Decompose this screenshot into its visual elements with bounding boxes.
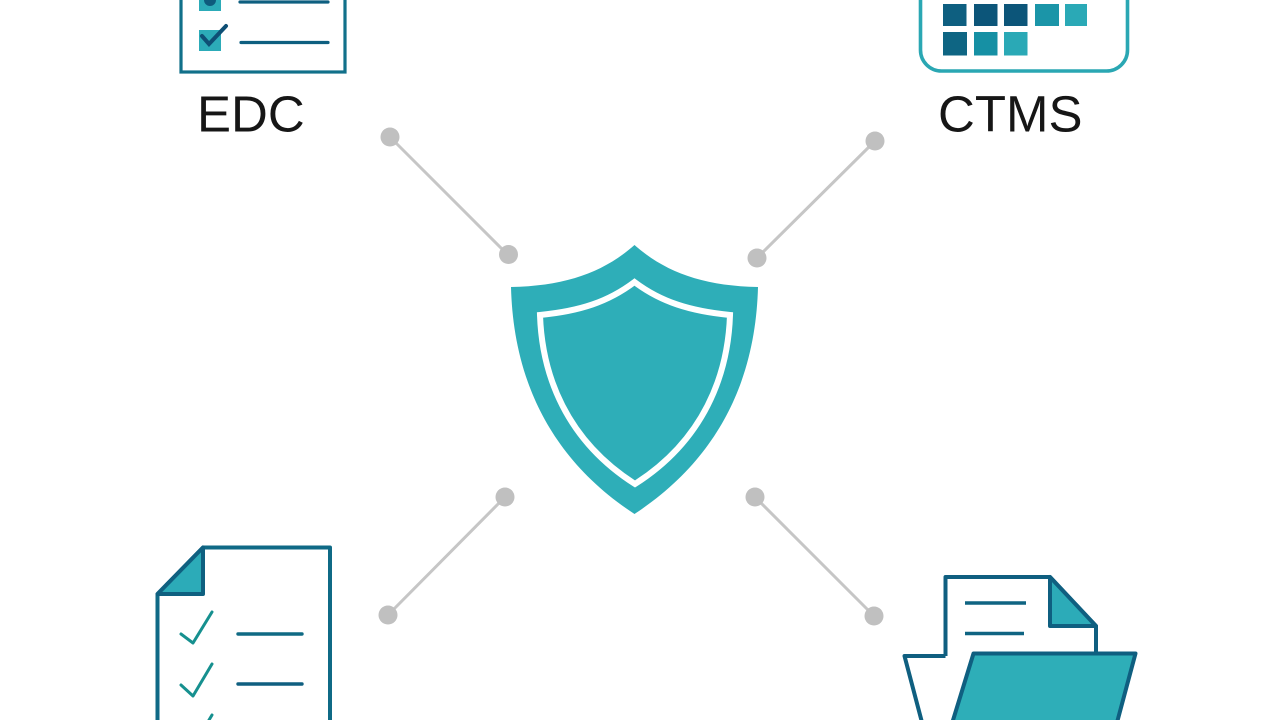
- icon: CTMS calendar grid: [920, 0, 1128, 71]
- connector: top-left: [380, 128, 518, 264]
- label: EDC: EDC: [197, 86, 305, 142]
- connector: bottom-left: [378, 488, 514, 624]
- icon: central shield: [511, 245, 758, 514]
- connector: top-right: [748, 132, 884, 268]
- connector: bottom-right: [746, 488, 884, 626]
- icon: checklist document: [158, 548, 330, 720]
- icon: open folder with document: [904, 577, 1136, 720]
- icon: EDC checklist form: [181, 0, 345, 72]
- label: CTMS: CTMS: [938, 86, 1082, 142]
